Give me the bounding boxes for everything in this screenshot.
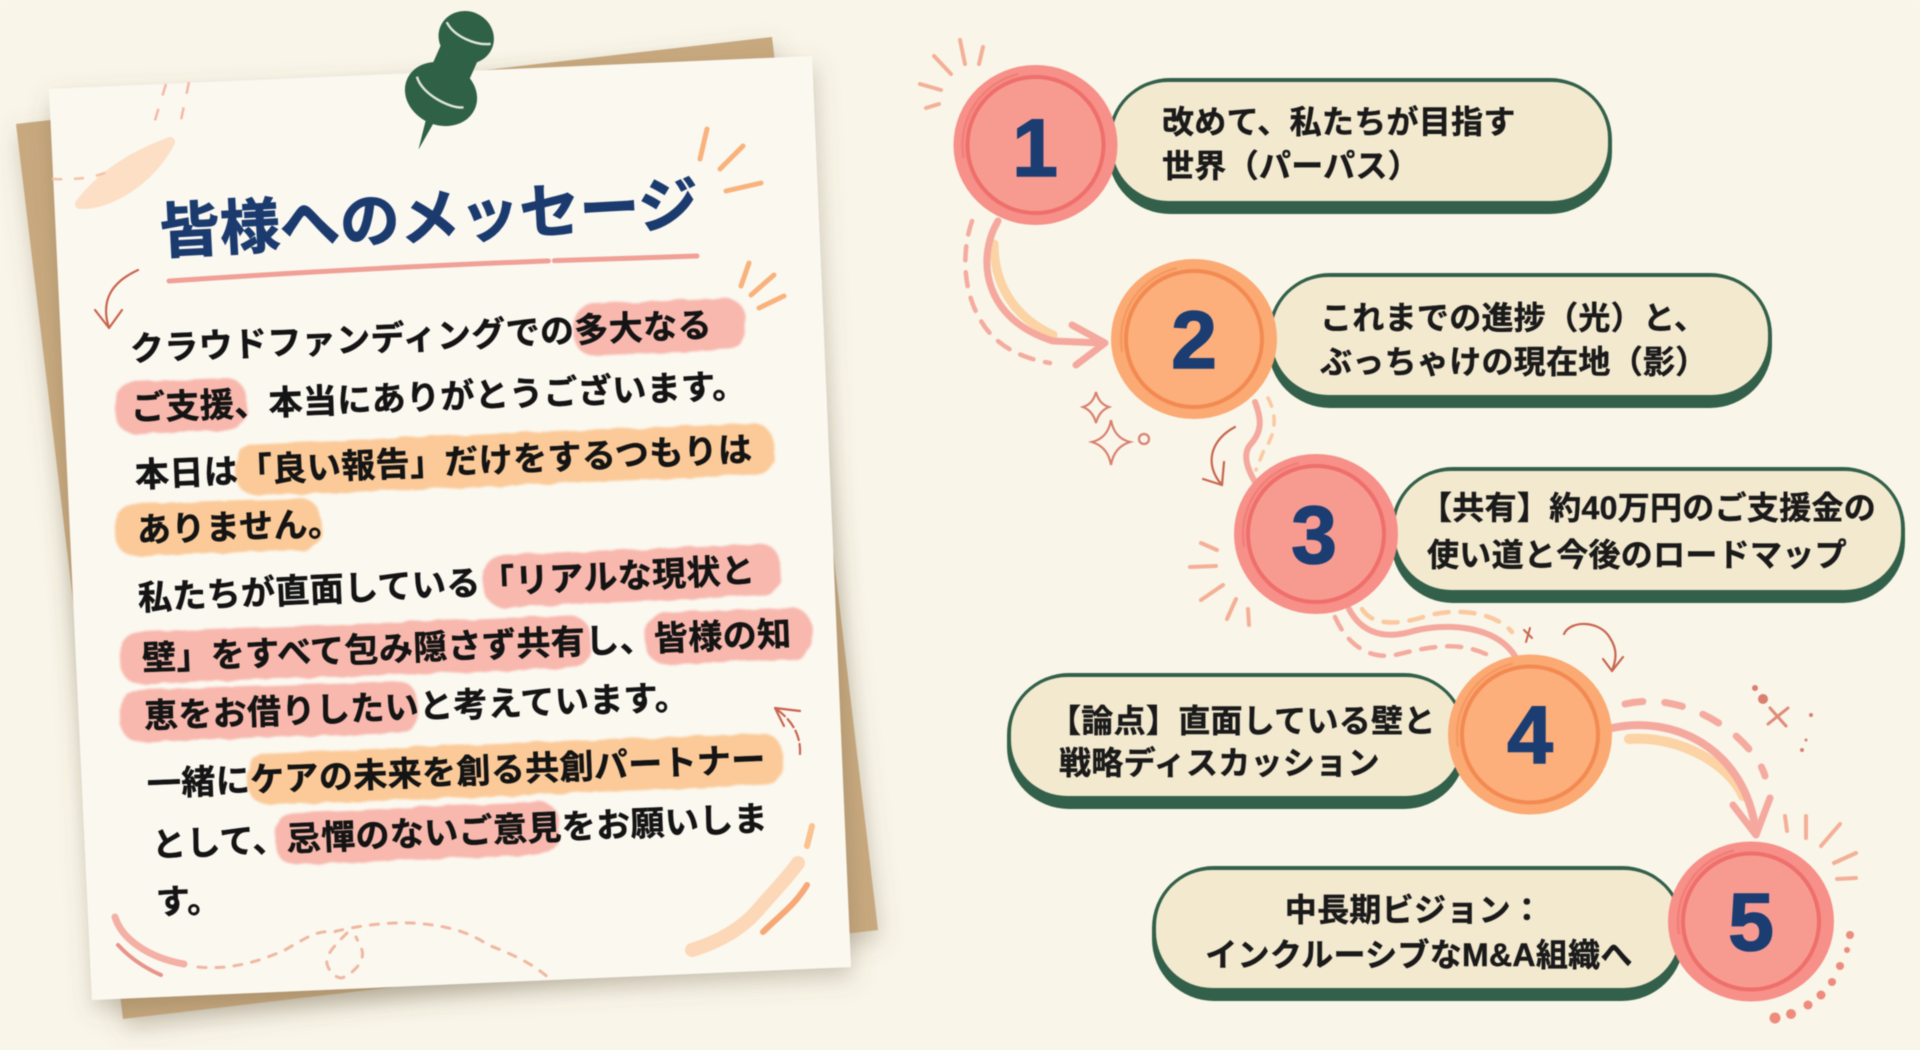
icon: body sparkle rays bbox=[741, 263, 784, 308]
text line 9: として、忌憚のないご意見をお願いしま bbox=[151, 800, 769, 865]
text line 6: 壁」をすべて包み隠さず共有し、皆様の知 bbox=[141, 616, 792, 678]
badge: number 1 bbox=[951, 60, 1120, 230]
pill: step 2: ぶっちゃけの現在地（影） bbox=[1320, 344, 1708, 380]
pill: step 1: 世界（パーパス） bbox=[1162, 148, 1420, 184]
pill: step 5: インクルーシブなM&A組織へ bbox=[1205, 937, 1633, 973]
doodle: bottom-right strokes bbox=[692, 826, 812, 950]
step 1 bbox=[951, 60, 1612, 230]
step 3 bbox=[1231, 449, 1905, 619]
text line 10: す。 bbox=[155, 882, 222, 922]
badge: number 1: 1 bbox=[1012, 103, 1058, 194]
arrow: step 4 to 5 bbox=[1612, 701, 1770, 835]
text line 8: 一緒にケアの未来を創る共創パートナー bbox=[146, 741, 767, 804]
rays: step 1 bbox=[920, 40, 983, 108]
text line 2: ご支援、本当にありがとうございます。 bbox=[130, 366, 747, 428]
rays: step 3 bbox=[1190, 543, 1249, 625]
badge: number 4: 4 bbox=[1507, 690, 1553, 781]
dots: step 5 bbox=[1770, 931, 1854, 1024]
text line 4: ありません。 bbox=[136, 505, 343, 550]
icon: thin arrow down left bbox=[95, 270, 138, 328]
badge: number 3 bbox=[1231, 449, 1401, 619]
badge: number 3: 3 bbox=[1291, 490, 1337, 581]
step 4 bbox=[1007, 650, 1615, 819]
kraft backing paper bbox=[16, 37, 878, 1019]
pill: step 3: 使い道と今後のロードマップ bbox=[1427, 537, 1847, 573]
badge: number 2 bbox=[1109, 254, 1279, 424]
arrow: step 1 to 2 bbox=[965, 221, 1105, 365]
doodle: top-left brush and dashes bbox=[52, 82, 189, 204]
arrow: step 2 to 3 bbox=[1203, 398, 1274, 485]
pill: step 2: これまでの進捗（光）と、 bbox=[1320, 300, 1706, 336]
icon: thin arrow near step 4 bbox=[1524, 624, 1623, 671]
pill: step 4 bbox=[1007, 673, 1466, 809]
icon: green pushpin bbox=[383, 0, 511, 164]
badge: number 5 bbox=[1666, 837, 1836, 1006]
icon: title sparkle rays bbox=[700, 129, 761, 191]
arrow: step 3 to 4 bbox=[1335, 609, 1515, 656]
doodle: bottom-left strokes bbox=[115, 917, 184, 975]
pill: step 2 bbox=[1268, 273, 1772, 408]
pill: step 1 bbox=[1108, 78, 1612, 214]
pill: step 5 bbox=[1152, 866, 1684, 1001]
cream note paper bbox=[49, 56, 851, 1000]
text line 4 bbox=[114, 497, 343, 557]
text line 7: 恵をお借りしたいと考えています。 bbox=[143, 679, 690, 736]
badge: number 2: 2 bbox=[1171, 295, 1217, 386]
icon: thin arrow up right bbox=[775, 708, 800, 754]
badge: number 5: 5 bbox=[1728, 877, 1774, 968]
icon: splatter marks bbox=[1752, 685, 1813, 752]
panel: message note bbox=[16, 37, 878, 1019]
text line 5: 私たちが直面している「リアルな現状と bbox=[137, 551, 756, 618]
pill: step 3: 【共有】約40万円のご支援金の bbox=[1420, 490, 1876, 526]
rays: step 5 bbox=[1785, 816, 1856, 879]
text line 1: クラウドファンディングでの多大なる bbox=[129, 306, 713, 369]
pill: step 3 bbox=[1391, 467, 1905, 603]
title: 皆様へのメッセージ bbox=[158, 171, 700, 266]
step 2 bbox=[1109, 254, 1772, 424]
pill: step 5: 中長期ビジョン： bbox=[1285, 892, 1543, 928]
badge: number 4 bbox=[1445, 650, 1615, 819]
text line 3: 本日は「良い報告」だけをするつもりは bbox=[134, 431, 753, 495]
step 5 bbox=[1152, 837, 1836, 1006]
title underline bbox=[169, 256, 697, 281]
icon: sparkles bbox=[1083, 392, 1149, 465]
doodle: dashed squiggle bbox=[198, 923, 551, 980]
pill: step 4: 【論点】直面している壁と bbox=[1049, 703, 1436, 739]
pill: step 4: 戦略ディスカッション bbox=[1059, 745, 1380, 781]
pill: step 1: 改めて、私たちが目指す bbox=[1162, 104, 1516, 140]
